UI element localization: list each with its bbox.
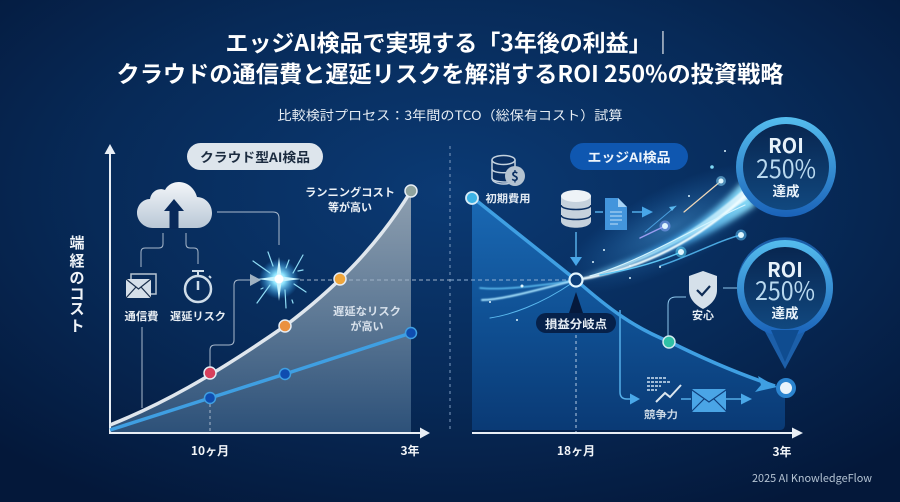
x label 18 months: 18ヶ月 [557,442,595,459]
label: running cost: 等が高い [328,199,372,215]
icon: document [605,198,627,230]
label: initial cost: 初期費用 [486,191,530,206]
stream: sparks [489,150,746,321]
label: peace of mind: 安心 [692,307,714,323]
y axis label: ス [69,298,85,319]
x label 10 months: 10ヶ月 [191,442,229,459]
icon: database [561,190,591,228]
icon: shield [689,271,717,309]
badge: ROI top: ROI [768,130,804,159]
badge: ROI top: 達成 [772,180,800,200]
divider [449,146,451,432]
title: クラウドの通信費と遅延リスクを解消するROI 250%の投資戦略 [116,55,784,89]
credit: 2025 AI KnowledgeFlow [752,470,872,486]
badge: ROI pin: 250% [755,272,815,308]
y axis label: コ [69,283,85,304]
icon: mail [126,274,156,298]
area fill [472,197,785,430]
arrowheads [570,206,752,404]
area fill [110,191,411,433]
callout: break-even: 損益分岐点 [545,316,608,332]
green point [663,336,675,348]
badge: ROI pin [737,237,833,369]
label: comm cost: 通信費 [124,308,158,324]
badge: cloud: クラウド型AI検品 [200,147,310,166]
panel: edge AI chart [450,138,803,439]
badge: ROI top [736,117,836,217]
break-even point [570,274,582,286]
stream: tails [640,226,665,238]
end point [778,380,794,396]
x label 3 years left: 3年 [400,442,420,459]
title [116,24,784,89]
guide lines [450,212,743,432]
x label 3 years right: 3年 [772,443,792,460]
edge curve [110,333,411,430]
y axis label: の [69,267,85,288]
icon: competitiveness chart [647,378,681,402]
label: running cost: ランニングコスト [305,184,395,200]
guide lines [141,212,450,433]
x axis [472,428,803,438]
label: latency risk: 遅延リスク [170,308,226,324]
badge: edge: エッジAI検品 [588,147,670,166]
axes [104,144,430,438]
y axis label: ト [69,315,85,336]
y axis label [69,232,85,336]
subtitle: 比較検討プロセス：3年間のTCO（総保有コスト）試算 [278,105,622,124]
label: competitiveness: 競争力 [644,407,678,422]
curve [472,197,775,386]
y axis label: 端 [69,232,85,253]
stream: glow [545,138,795,318]
icon: database coin: $ [511,166,519,185]
icon: cloud upload [137,182,212,229]
icon: database coin [492,156,525,186]
badge: ROI pin: ROI [767,254,803,283]
icon: mail blue [692,389,726,412]
badge: ROI pin: 達成 [772,302,799,322]
label: latency risk high: が高い [350,318,384,334]
start point [466,192,478,204]
arrowhead [755,376,777,392]
data points [204,185,417,379]
stream: light [480,181,756,318]
icon: stopwatch [185,271,211,302]
panel: cloud AI chart [104,144,450,438]
badge: ROI top: 250% [756,150,816,186]
label: latency risk high: 遅延なリスク [333,303,401,319]
icon: starburst [253,252,306,308]
title: エッジAI検品で実現する「3年後の利益」｜ [226,24,674,58]
cost curve [110,191,411,425]
y axis label: 経 [69,250,85,271]
badge: edge [570,143,688,170]
callout: break-even [536,292,616,333]
badge: cloud [187,143,323,170]
